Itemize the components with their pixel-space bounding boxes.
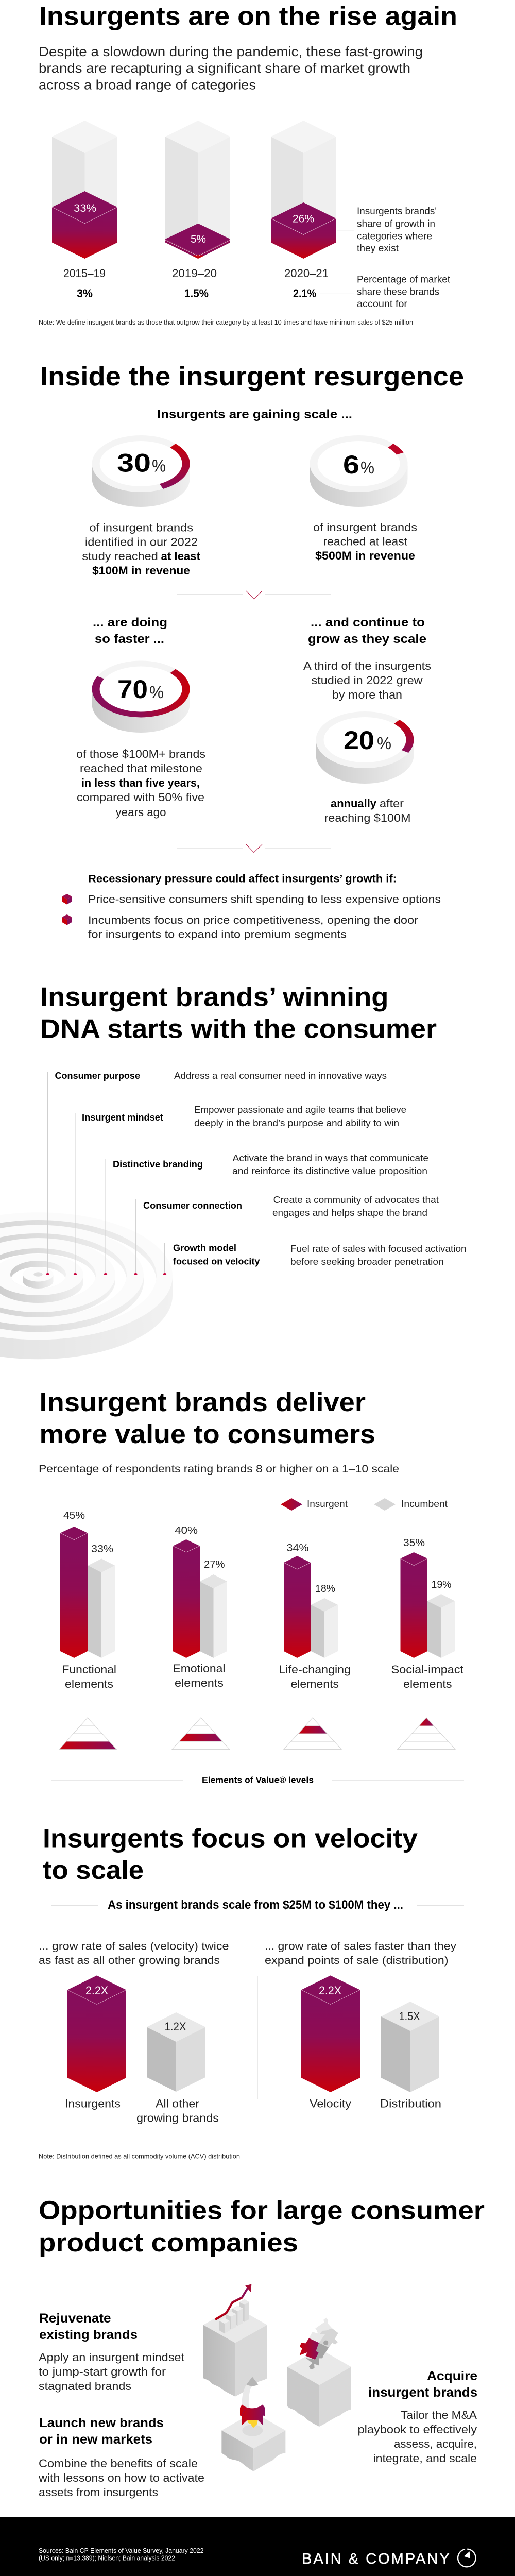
- bars: life-changing: 34%: [286, 1543, 309, 1554]
- text: acquire: Acquire: [427, 2369, 477, 2383]
- title: Insurgents are on the rise again: [39, 2, 457, 31]
- title: Inside the insurgent resurgence: [40, 362, 464, 392]
- disc: 6%: 6: [343, 450, 359, 479]
- disc text: 30%: of insurgent brands: [90, 521, 193, 534]
- text: right column intro: ... grow rate of sales faster than they: [265, 1940, 457, 1953]
- bar labels: Distribution: [380, 2097, 441, 2110]
- item: consumer purpose: Consumer purpose: [55, 1071, 140, 1081]
- category labels: Functional: [62, 1663, 116, 1676]
- year labels and market share values: 2019–20: [172, 267, 217, 280]
- disc: 6%: %: [360, 458, 374, 477]
- bars: life-changing: [284, 1543, 338, 1658]
- block with puzzle: [287, 2318, 351, 2427]
- category labels: elements: [403, 1677, 452, 1690]
- text: right column intro: expand points of sale (distribution): [265, 1955, 449, 1967]
- bar: all others 1.2X: [147, 2012, 205, 2092]
- bullet 2: [62, 914, 418, 941]
- text: launch: Combine the benefits of scale: [39, 2457, 198, 2470]
- chart: bar 2020–21 26%: [271, 121, 336, 259]
- bar: velocity 2.2X: 2.2X: [319, 1984, 341, 1997]
- chart: bar 2015–19 33%: [52, 121, 117, 259]
- text: acquire: insurgent brands: [368, 2385, 477, 2400]
- item: growth model: Fuel rate of sales with focused activation: [290, 1244, 467, 1254]
- category labels: elements: [175, 1676, 224, 1689]
- legend: share of growth: share of growth in: [357, 219, 435, 230]
- item: growth model: before seeking broader penetration: [290, 1257, 444, 1267]
- note: Note: We define insurgent brands as those that outgrow their category by at least 10 times and have minimum sales of $25 million: [39, 319, 413, 326]
- arrow divider: [177, 844, 331, 852]
- year labels and market share values: 3%: [77, 287, 93, 300]
- text: rejuvenate: Apply an insurgent mindset: [39, 2351, 184, 2364]
- year labels and market share values: [63, 267, 329, 300]
- disc: 70%: [92, 660, 190, 733]
- bar labels: All other: [156, 2097, 199, 2110]
- disc text: 20%: reaching $100M: [324, 811, 411, 824]
- bar: all others 1.2X: 1.2X: [165, 2020, 186, 2033]
- category labels: [62, 1662, 464, 1690]
- leader lines and dots: [46, 1072, 166, 1275]
- heading: doing so faster: [93, 616, 167, 646]
- text: launch: or in new markets: [39, 2432, 152, 2447]
- bar: velocity 2.2X: [301, 1975, 360, 2092]
- bar labels: Velocity: [310, 2097, 351, 2110]
- disc text: 70%: compared with 50% five: [77, 791, 204, 804]
- disc text: 30%: study reached: [82, 550, 158, 563]
- item: insurgent mindset: deeply in the brand’s purpose and ability to win: [194, 1118, 399, 1128]
- title: to scale: [43, 1855, 144, 1885]
- section: deliver more value: [39, 1387, 464, 1785]
- bars: functional: 45%: [63, 1510, 85, 1521]
- title: more value to consumers: [39, 1419, 375, 1449]
- category labels: Emotional: [173, 1662, 226, 1675]
- text: third of insurgents: studied in 2022 grew: [311, 674, 423, 687]
- item: insurgent mindset: [82, 1105, 406, 1128]
- text: third of insurgents: by more than: [332, 688, 402, 701]
- title: Opportunities for large consumer: [39, 2195, 485, 2225]
- bar: insurgents 2.2X: 2.2X: [85, 1984, 108, 1997]
- item: distinctive branding: Activate the brand in ways that communicate: [233, 1153, 428, 1163]
- legend: market share: share these brands: [357, 286, 439, 298]
- bars: life-changing: 18%: [315, 1583, 335, 1595]
- sources: (US only; n=13,389); Nielsen; Bain analysis 2022: [39, 2554, 175, 2562]
- text: acquire: [357, 2369, 477, 2465]
- item: insurgent mindset: Insurgent mindset: [82, 1112, 163, 1123]
- heading: doing so faster: ... are doing: [93, 616, 167, 630]
- icon: cube bullet: [62, 914, 72, 925]
- legend: market share: [320, 275, 451, 310]
- text: third of insurgents: A third of the insurgents: [303, 659, 431, 672]
- subtitle: Percentage of respondents rating brands 8 or higher on a 1–10 scale: [39, 1463, 399, 1475]
- bar: distribution 1.5X: [381, 2002, 439, 2092]
- chart: bar 2020–21 26%: 26%: [293, 213, 314, 225]
- disc: 6%: [310, 435, 408, 507]
- recession heading: Recessionary pressure could affect insurgents’ growth if:: [88, 873, 397, 885]
- category labels: Social-impact: [391, 1663, 464, 1676]
- disc text: 30%: at least: [161, 550, 201, 563]
- disc: 30%: [92, 435, 190, 507]
- item: consumer purpose: Address a real consumer need in innovative ways: [174, 1071, 387, 1081]
- disc text: 20%: after: [380, 797, 404, 810]
- intro text: across a broad range of categories: [39, 77, 256, 93]
- legend: share of growth: categories where: [357, 231, 432, 242]
- bars: social-impact: 19%: [432, 1579, 452, 1590]
- sources: Sources: Bain CP Elements of Value Survey, January 2022: [39, 2547, 204, 2554]
- bars: emotional: 40%: [175, 1525, 198, 1536]
- disc: 70%: %: [149, 683, 164, 702]
- heading: gaining scale: Insurgents are gaining scale ...: [157, 408, 352, 421]
- growth arrow: [215, 2284, 251, 2320]
- bars: social-impact: [401, 1537, 455, 1658]
- heading: continue to grow: grow as they scale: [308, 632, 426, 646]
- year labels and market share values: 2020–21: [284, 267, 329, 280]
- item: growth model: Growth model: [173, 1243, 236, 1253]
- disc text: 70%: of those $100M+ brands: [76, 748, 205, 760]
- text: launch: assets from insurgents: [39, 2486, 158, 2499]
- bar labels: growing brands: [136, 2112, 219, 2125]
- bar: insurgents 2.2X: [67, 1975, 126, 2092]
- legend: Insurgent: [307, 1499, 348, 1509]
- chart: bar 2019–20 5%: 5%: [191, 233, 206, 245]
- disc text: 70%: [76, 748, 205, 819]
- bar labels: [65, 2097, 441, 2125]
- item: growth model: focused on velocity: [173, 1257, 260, 1267]
- text: rejuvenate: [39, 2311, 184, 2393]
- title: Insurgent brands deliver: [39, 1387, 366, 1417]
- section: insurgents on the rise: [39, 2, 457, 326]
- intro text: [39, 44, 423, 93]
- category labels: Life-changing: [279, 1663, 351, 1676]
- disc: 20%: 20: [344, 726, 374, 755]
- text: acquire: Tailor the M&A: [401, 2409, 477, 2421]
- item: distinctive branding: and reinforce its distinctive value proposition: [232, 1166, 427, 1176]
- text: rejuvenate: to jump-start growth for: [39, 2365, 166, 2378]
- illustration: concentric rings: [0, 1212, 173, 1359]
- pyramid: emotional: [172, 1718, 230, 1750]
- item: distinctive branding: [113, 1153, 428, 1176]
- footer: [0, 2517, 515, 2576]
- arrow divider: [177, 591, 331, 599]
- text: rejuvenate: Rejuvenate: [39, 2311, 111, 2326]
- sources: [39, 2547, 204, 2562]
- year labels and market share values: 1.5%: [184, 287, 209, 300]
- panel divider: [257, 1976, 258, 2099]
- pyramid: life-changing: [284, 1718, 341, 1750]
- text: left column intro: ... grow rate of sales (velocity) twice: [39, 1940, 229, 1953]
- disc text: 6%: [313, 521, 417, 562]
- bar labels: Insurgents: [65, 2097, 121, 2110]
- item: consumer purpose: [55, 1071, 387, 1081]
- intro text: brands are recapturing a significant share of market growth: [39, 60, 410, 76]
- legend: share of growth: [337, 206, 437, 254]
- chart: bar 2015–19 33%: 33%: [74, 202, 96, 214]
- year labels and market share values: 2015–19: [63, 267, 106, 280]
- intro text: Despite a slowdown during the pandemic, these fast-growing: [39, 44, 423, 59]
- text: third of insurgents: [303, 659, 431, 701]
- rocket: [240, 2377, 265, 2428]
- disc text: 6%: reached at least: [323, 535, 407, 548]
- text: left column intro: [39, 1940, 229, 1967]
- legend: share of growth: Insurgents brands': [357, 206, 437, 217]
- disc text: 6%: $500M in revenue: [315, 549, 415, 562]
- year labels and market share values: 2.1%: [293, 287, 316, 300]
- section: velocity to scale: [39, 1824, 464, 2160]
- bar: distribution 1.5X: 1.5X: [399, 2010, 420, 2023]
- title: [39, 1387, 375, 1449]
- disc: 30%: 30: [117, 448, 151, 477]
- bars: emotional: [173, 1525, 227, 1658]
- bullet 1: Price-sensitive consumers shift spending to less expensive options: [88, 893, 441, 906]
- logo icon: [458, 2549, 476, 2567]
- logo wordmark: BAIN & COMPANY: [302, 2551, 450, 2567]
- section: inside the insurgent resurgence: [40, 362, 464, 941]
- disc: 20%: %: [377, 734, 391, 753]
- note: Note: Distribution defined as all commodity volume (ACV) distribution: [39, 2153, 240, 2160]
- bars: emotional: 27%: [204, 1559, 225, 1570]
- disc: 20%: [316, 711, 414, 784]
- title: Insurgents focus on velocity: [43, 1824, 418, 1853]
- pyramid caption: Elements of Value® levels: [202, 1775, 314, 1785]
- title: [43, 1824, 418, 1885]
- disc text: 30%: [82, 521, 201, 577]
- disc: 70%: 70: [117, 675, 148, 704]
- text: launch: [38, 2416, 204, 2499]
- disc text: 70%: years ago: [115, 806, 166, 819]
- title: product companies: [39, 2228, 298, 2257]
- puzzle pieces: [300, 2318, 338, 2369]
- legend: market share: account for: [357, 299, 408, 310]
- item: growth model: [173, 1243, 467, 1267]
- bullet 2: Incumbents focus on price competitiveness, opening the door: [88, 914, 418, 926]
- text: acquire: playbook to effectively: [357, 2423, 477, 2436]
- heading: continue to grow: [308, 616, 426, 646]
- title: [40, 982, 437, 1044]
- text: rejuvenate: existing brands: [39, 2328, 138, 2342]
- category labels: elements: [290, 1677, 339, 1690]
- legend: Incumbent: [401, 1499, 448, 1509]
- legend: share of growth: they exist: [357, 243, 399, 254]
- disc text: 30%: $100M in revenue: [92, 564, 190, 577]
- item: consumer connection: Consumer connection: [143, 1200, 242, 1211]
- title: DNA starts with the consumer: [40, 1014, 437, 1044]
- chart: bar 2019–20 5%: [165, 121, 230, 259]
- text: left column intro: as fast as all other growing brands: [39, 1955, 220, 1967]
- section: winning DNA: [0, 982, 467, 1359]
- bullet 2: for insurgents to expand into premium segments: [88, 929, 347, 941]
- text: launch: Launch new brands: [39, 2416, 164, 2430]
- bars: functional: 33%: [91, 1544, 113, 1555]
- text: right column intro: [265, 1940, 457, 1967]
- text: launch: with lessons on how to activate: [38, 2471, 204, 2484]
- item: consumer connection: Create a community of advocates that: [273, 1195, 439, 1205]
- pyramid: social-impact: [398, 1718, 455, 1750]
- disc text: 6%: of insurgent brands: [313, 521, 417, 534]
- text: rejuvenate: stagnated brands: [39, 2380, 131, 2393]
- heading: doing so faster: so faster ...: [95, 632, 164, 646]
- block with rocket: [221, 2377, 285, 2471]
- title: Insurgent brands’ winning: [40, 982, 388, 1012]
- title: [39, 2195, 485, 2257]
- block with growth chart: [203, 2284, 267, 2397]
- bars: social-impact: 35%: [403, 1537, 425, 1549]
- disc text: 20%: annually: [331, 797, 377, 810]
- item: distinctive branding: Distinctive branding: [113, 1159, 203, 1170]
- heading: continue to grow: ... and continue to: [311, 616, 425, 630]
- text: acquire: assess, acquire,: [394, 2437, 477, 2450]
- illustration: three blocks: [203, 2284, 351, 2471]
- section: opportunities: [38, 2195, 485, 2499]
- legend: [281, 1498, 448, 1511]
- icon: cube bullet: [62, 894, 72, 905]
- legend: market share: Percentage of market: [357, 275, 451, 285]
- text: acquire: integrate, and scale: [373, 2452, 477, 2465]
- disc: 30%: %: [152, 456, 166, 475]
- disc text: 20%: [324, 797, 411, 824]
- category labels: elements: [65, 1677, 113, 1690]
- disc text: 70%: in less than five years,: [81, 776, 200, 789]
- disc text: 70%: reached that milestone: [80, 762, 202, 775]
- disc text: 30%: identified in our 2022: [85, 536, 198, 549]
- bars: functional: [60, 1510, 115, 1658]
- heading: scale from 25M to 100M: As insurgent brands scale from $25M to $100M they ...: [108, 1898, 403, 1912]
- item: insurgent mindset: Empower passionate and agile teams that believe: [194, 1105, 406, 1115]
- pyramid: functional: [59, 1718, 116, 1750]
- item: consumer connection: engages and helps shape the brand: [272, 1208, 427, 1218]
- item: consumer connection: [143, 1195, 439, 1218]
